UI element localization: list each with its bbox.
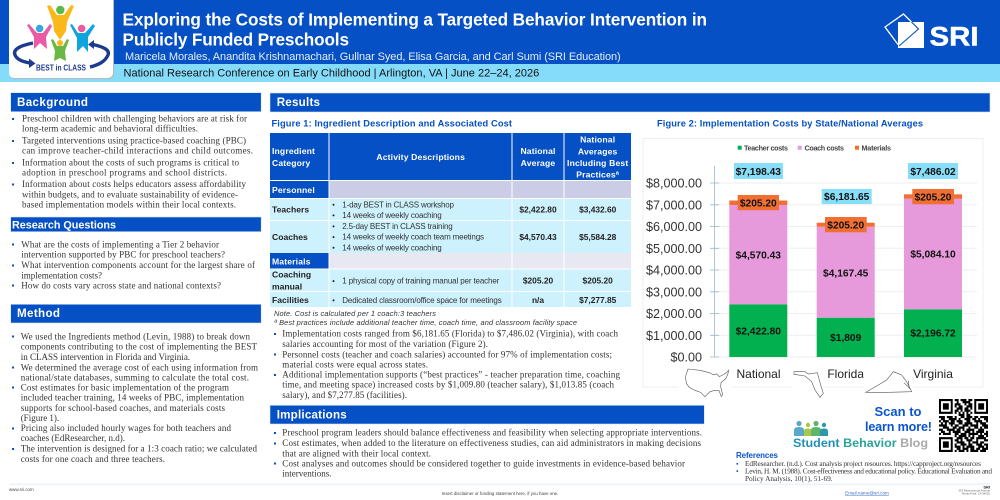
footer address: Menlo Park, CA 94025 (962, 492, 990, 496)
text block: reference list: EdResearcher. (n.d.). Cost analysis project resources. https://capproject.org/resources (745, 459, 981, 468)
blog wordmark: Student Behavior Blog (793, 436, 928, 450)
table: ingredient costs: n/a (532, 295, 544, 305)
icon: green figure (51, 39, 69, 61)
chart legend (738, 144, 891, 152)
text block: research question bullets: implementation costs? (21, 270, 102, 280)
text block: results bullets: material costs were equal across states. (282, 359, 428, 369)
bar: virginia: $205.20 (915, 193, 952, 204)
callout: scan to learn more (865, 404, 932, 434)
text block: method bullets: coaches (EdResearcher, n.d). (21, 433, 125, 443)
heading: background (11, 93, 261, 112)
text block: background bullets: long-term academic and behavioral difficulties. (22, 124, 198, 134)
icon: pink figure (27, 24, 52, 49)
table: ingredient costs: $2,422.80 (519, 205, 557, 215)
footer (9, 484, 991, 496)
heading: implications (270, 405, 704, 424)
heading: research questions: Research Questions (12, 220, 116, 232)
table: ingredient costs: $205.20 (523, 276, 553, 286)
header banner (0, 0, 1000, 82)
text block: results bullets: salaries accounting for most of the variation (Figure 2). (282, 339, 488, 349)
icon: blue figure (70, 24, 95, 52)
text block: implications bullets (274, 428, 702, 479)
table: ingredient costs: $4,570.43 (519, 232, 557, 242)
table: ingredient costs: Facilities (272, 295, 309, 305)
text block: method bullets (12, 331, 258, 464)
table note: ª Best practices include additional teacher time, coach time, and classroom facility space (274, 318, 577, 327)
text block: implications bullets: interventions. (282, 469, 332, 479)
category labels: National (736, 367, 781, 381)
authors: Maricela Morales, Anandita Krishnamachari, Gullnar Syed, Elisa Garcia, and Carl Sumi (SRI Education) (125, 51, 621, 63)
chart legend: Teacher costs (744, 144, 788, 152)
bar: virginia: $2,196.72 (910, 329, 956, 340)
text block: background bullets: within budgets, and to evaluate sustainability of evidence- (22, 190, 238, 200)
table: ingredient costs: Category (272, 158, 311, 168)
text block: results bullets: salary), and $7,277.85 (facilities). (282, 390, 407, 400)
panel: references (736, 451, 992, 483)
table: ingredient costs: Coaching (272, 270, 311, 280)
icon: QR code (939, 399, 988, 452)
table: ingredient costs: Teachers (272, 205, 309, 215)
footer email: Email.name@sri.com (845, 490, 889, 496)
panel: implications (270, 405, 704, 479)
table: ingredient costs: Dedicated classroom/office space for meetings (342, 296, 502, 305)
heading: results: Results (277, 96, 320, 109)
text block: results bullets (274, 329, 620, 400)
logo: SRI (885, 14, 978, 52)
heading: method (11, 304, 261, 323)
footer url: www.sri.com (9, 487, 34, 492)
title: Publicly Funded Preschools (122, 30, 349, 50)
text block: implications bullets: Cost estimates, when added to the literature on effectiveness studies, can aid administrators in making decisions (282, 438, 701, 448)
table: ingredient costs: Practicesª (576, 170, 620, 180)
text block: method bullets: national/state databases, summing to calculate the total cost. (21, 372, 249, 382)
text block: results bullets: Personnel costs (teacher and coach salaries) accounted for 97% of implementation costs; (282, 349, 612, 359)
y axis labels: $6,000.00 (646, 220, 702, 234)
table: ingredient costs: Average (521, 158, 555, 168)
conference line: National Research Conference on Early Childhood | Arlington, VA | June 22–24, 2026 (124, 68, 539, 80)
bar: virginia: $7,486.02 (910, 167, 956, 178)
table: ingredient costs: National (580, 134, 615, 144)
heading: figure 2: Figure 2: Implementation Costs by State/National Averages (657, 119, 923, 129)
text block: research question bullets: How do costs vary across state and national contexts? (21, 280, 221, 290)
table: ingredient costs: Averages (578, 146, 618, 156)
bar: national: $4,570.43 (736, 250, 781, 261)
table note (274, 309, 577, 327)
title (122, 10, 707, 50)
callout: scan to learn more: Scan to (875, 404, 922, 419)
table: ingredient costs: National (520, 146, 556, 156)
logo: BEST in CLASS (9, 0, 114, 79)
logo: SRI: SRI (930, 22, 978, 52)
text block: method bullets: included teacher training, 14 weeks of PBC, implementation (21, 393, 245, 403)
bar: national: $205.20 (740, 199, 777, 210)
y axis labels: $0.00 (670, 350, 702, 364)
y axis labels (646, 176, 702, 364)
text block: reference list: Levin, H. M. (1988). Cost-effectiveness and educational policy. Educational Evaluation and (745, 466, 992, 475)
heading: results (270, 93, 990, 112)
y axis labels: $2,000.00 (646, 307, 702, 321)
text block: reference list (736, 459, 992, 483)
table: ingredient costs: Activity Descriptions (376, 152, 465, 162)
table: ingredient costs: Personnel (272, 185, 315, 195)
text block: background bullets: based implementation models within their local contexts. (22, 200, 236, 210)
heading: research questions (11, 217, 261, 232)
table: ingredient costs: 1-day BEST in CLASS workshop (342, 200, 455, 209)
text block: research question bullets: What are the costs of implementing a Tier 2 behavior (21, 239, 219, 249)
heading: references: References (736, 451, 779, 460)
icon: student behavior blog people (794, 421, 828, 436)
table: ingredient costs: manual (272, 281, 302, 291)
chart: implementation costs stacked bars (643, 138, 983, 387)
bar: national: $2,422.80 (736, 326, 781, 337)
panel: results (270, 93, 990, 400)
y axis labels: $8,000.00 (646, 176, 702, 190)
text block: method bullets: We used the Ingredients method (Levin, 1988) to break down (21, 331, 251, 341)
text block: method bullets: in CLASS intervention in Florida and Virginia. (21, 352, 190, 362)
panel: method (11, 304, 261, 464)
text block: reference list: Policy Analysis, 10(1), 51-69. (745, 474, 833, 483)
bar: florida: $6,181.65 (824, 192, 870, 203)
text block: background bullets: adoption in preschool programs and school districts. (22, 168, 227, 178)
table: ingredient costs: Materials (272, 256, 311, 266)
chart legend: Coach costs (804, 144, 844, 152)
text block: background bullets: Information about costs helps educators assess affordability (22, 179, 246, 189)
table: ingredient costs: 14 weeks of weekly coaching (342, 211, 442, 220)
bar: national: $7,198.43 (736, 167, 781, 178)
y axis labels: $4,000.00 (646, 264, 702, 278)
icon: right arrow (88, 40, 108, 67)
heading: background: Background (17, 96, 88, 109)
icon: left arrow (15, 43, 36, 68)
text block: research question bullets: What intervention components account for the largest share of (21, 260, 255, 270)
table: ingredient costs: 14 weeks of weekly coach team meetings (342, 233, 484, 242)
table: ingredient costs: Coaches (272, 232, 308, 242)
footer address: 333 Ravenswood Avenue (958, 488, 990, 492)
heading: figure 1: Figure 1: Ingredient Description and Associated Cost (272, 119, 512, 129)
category labels: Virginia (913, 367, 953, 381)
table: ingredient costs (270, 133, 631, 307)
text block: method bullets: Pricing also included hourly wages for both teachers and (21, 423, 232, 433)
text block: method bullets: We determined the average cost of each using information from (21, 362, 258, 372)
footer disclaimer: Insert disclaimer or funding statement here, if you have one. (442, 491, 558, 496)
table note: Note. Cost is calculated per 1 coach:3 teachers (274, 309, 436, 318)
table: ingredient costs: $5,584.28 (579, 232, 617, 242)
text block: research question bullets: intervention supported by PBC for preschool teachers? (21, 250, 225, 260)
table: ingredient costs: 1 physical copy of training manual per teacher (342, 277, 500, 286)
y axis labels: $7,000.00 (646, 198, 702, 212)
text block: background bullets: Targeted interventions using practice-based coaching (PBC) (22, 135, 246, 145)
bar: florida: $1,809 (830, 333, 862, 344)
table: ingredient costs: $3,432.60 (579, 205, 617, 215)
bar: national (729, 163, 787, 357)
footer address (958, 484, 990, 496)
table: ingredient costs: $7,277.85 (579, 295, 617, 305)
category labels: Florida (827, 367, 864, 381)
heading: implications: Implications (277, 408, 347, 422)
table: ingredient costs: 2.5-day BEST in CLASS training (342, 222, 453, 231)
table: ingredient costs: Ingredient (272, 146, 315, 156)
heading: method: Method (17, 307, 60, 320)
bar: florida: $205.20 (827, 220, 864, 231)
text block: background bullets: can improve teacher-child interactions and child outcomes. (22, 146, 253, 156)
text block: method bullets: components contributing to the cost of implementing the BEST (21, 342, 258, 352)
y axis labels: $3,000.00 (646, 285, 702, 299)
panel: background (11, 93, 261, 210)
text block: method bullets: supports for school-based coaches, and materials costs (21, 403, 225, 413)
table: ingredient costs: 14 weeks of weekly coaching (342, 243, 442, 252)
text block: results bullets: time, and meeting space) increased costs by $1,009.80 (teacher salary), $1,013.85 (coach (282, 380, 614, 390)
icon: US map (678, 367, 732, 401)
text block: implications bullets: that are aligned with their local context. (282, 448, 431, 458)
logo wordmark: BEST in CLASS (36, 62, 86, 72)
text block: method bullets: The intervention is designed for a 1:3 coach ratio; we calculated (21, 444, 258, 454)
text block: background bullets: Information about the costs of such programs is critical to (22, 157, 240, 167)
text block: results bullets: Implementation costs ranged from $6,181.65 (Florida) to $7,486.02 (Virginia), with coach (282, 329, 618, 339)
table: ingredient costs: $205.20 (583, 276, 613, 286)
icon: Virginia map (863, 369, 913, 394)
chart legend: Materials (862, 144, 891, 152)
text block: method bullets: costs for one coach and three teachers. (21, 454, 165, 464)
bar: virginia (904, 163, 962, 357)
bar: florida: $4,167.45 (823, 269, 869, 280)
text block: implications bullets: Preschool program leaders should balance effectiveness and feasibility when selecting appropriate interventions. (282, 428, 702, 438)
table: ingredient costs: Including Best (567, 158, 628, 168)
icon: Florida map (792, 369, 825, 399)
text block: method bullets: (Figure 1). (21, 413, 59, 423)
bar: virginia: $5,084.10 (910, 250, 956, 261)
text block: background bullets: Preschool children with challenging behaviors are at risk for (22, 114, 247, 124)
text block: results bullets: Additional implementation supports (“best practices” - teacher preparation time, coaching (282, 370, 620, 380)
y axis labels: $1,000.00 (646, 329, 702, 343)
y axis labels: $5,000.00 (646, 242, 702, 256)
text block: background bullets (12, 114, 253, 210)
icon: yellow figure (47, 5, 74, 40)
bar: florida (817, 189, 875, 357)
text block: research question bullets (12, 239, 255, 290)
title: Exploring the Costs of Implementing a Targeted Behavior Intervention in (122, 10, 707, 30)
text block: implications bullets: Cost analyses and outcomes should be considered together to guide investments in evidence-based behavior (282, 458, 685, 468)
category labels (736, 367, 953, 381)
panel: research questions (11, 217, 261, 290)
text block: method bullets: Cost estimates for basic implementation of the program (21, 382, 229, 392)
footer address: SRI (983, 484, 990, 490)
callout: scan to learn more: learn more! (865, 420, 932, 434)
